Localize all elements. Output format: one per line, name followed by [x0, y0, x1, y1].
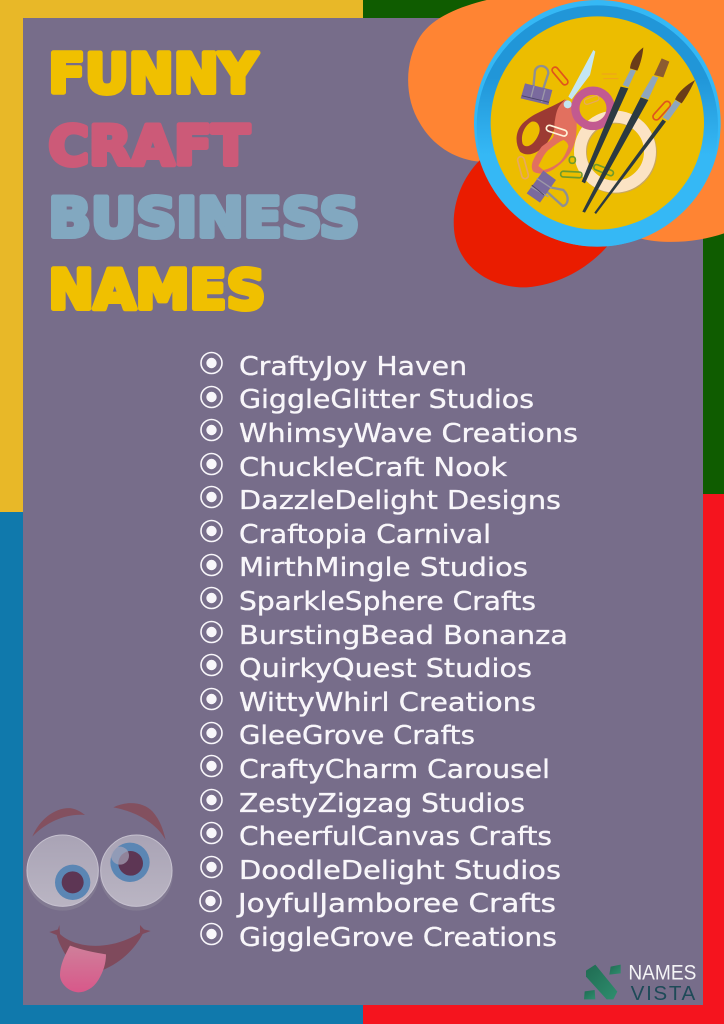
name text: WhimsyWave Creations — [239, 419, 578, 449]
iris — [110, 843, 150, 882]
name text: GiggleGrove Creations — [239, 923, 557, 953]
craft illustration — [408, 0, 724, 287]
background border: yellow — [0, 0, 363, 512]
paint brush 2 — [582, 58, 669, 213]
clip edge — [522, 96, 549, 102]
clip body — [521, 83, 552, 105]
right eye — [100, 835, 173, 911]
bristle — [654, 58, 669, 77]
names vista logo — [584, 960, 696, 1005]
list of names — [200, 352, 578, 953]
name text: BurstingBead Bonanza — [239, 621, 568, 651]
title line: Craft: CRAFT — [48, 114, 250, 178]
clip pale in ring — [584, 95, 600, 105]
ferrule — [663, 100, 681, 121]
background border: green — [363, 0, 724, 494]
tape roll — [580, 117, 651, 188]
right eyebrow — [113, 803, 166, 840]
name text: GiggleGlitter Studios — [239, 385, 534, 415]
name text: SparkleSphere Crafts — [239, 587, 536, 617]
clip pale — [517, 156, 529, 179]
eye shadow — [100, 837, 173, 911]
name text — [236, 352, 578, 953]
darker blue ring — [477, 5, 718, 247]
scissor handle light — [532, 99, 577, 173]
pink ring — [575, 91, 611, 126]
name text: MirthMingle Studios — [239, 553, 528, 583]
name text: ZestyZigzag Studios — [239, 789, 525, 819]
bristle — [630, 47, 643, 71]
logo text: names: NAMES — [628, 960, 696, 984]
title line: Names: NAMES — [48, 258, 266, 322]
clip wire front — [531, 86, 545, 102]
name text: CraftyCharm Carousel — [239, 755, 550, 785]
blue circle badge — [474, 0, 721, 247]
clip edge — [532, 185, 544, 195]
glint — [111, 847, 129, 865]
title — [48, 42, 360, 322]
pupil — [62, 871, 84, 893]
name text: JoyfulJamboree Crafts — [236, 889, 556, 919]
scissor blade — [568, 50, 595, 99]
faint pencil lines — [602, 74, 618, 79]
binder clip top — [521, 66, 552, 105]
tape shadow — [581, 118, 651, 188]
handle — [582, 97, 648, 213]
title line: Funny: FUNNY — [48, 42, 258, 106]
orange blob — [408, 0, 724, 242]
paint brush 3 — [594, 80, 695, 214]
clip green — [561, 171, 582, 178]
eye shadow — [26, 837, 99, 911]
paper clips — [517, 66, 672, 179]
name text: WittyWhirl Creations — [239, 688, 536, 718]
name text: CheerfulCanvas Crafts — [239, 822, 552, 852]
left eyebrow — [32, 808, 85, 837]
clip wire — [533, 66, 548, 97]
scissor pivot — [564, 100, 572, 108]
tongue — [60, 946, 106, 992]
name text: GleeGrove Crafts — [239, 721, 475, 751]
tape body — [580, 117, 650, 187]
clip green right — [593, 164, 614, 176]
title line: Business: BUSINESS — [48, 186, 360, 250]
ferrule — [623, 69, 636, 87]
smiling face icon — [26, 803, 173, 992]
clip wire — [545, 187, 568, 206]
background border: blue — [0, 512, 363, 1024]
clip green small — [569, 157, 575, 163]
pupil — [118, 851, 143, 876]
bristle — [675, 80, 695, 103]
mouth — [49, 925, 151, 971]
scissor handle dark — [517, 99, 565, 154]
clip body — [527, 171, 556, 203]
handle — [594, 119, 666, 214]
logo text: vista: VISTA — [631, 982, 696, 1005]
background border: red — [363, 494, 724, 1024]
logo mark — [584, 965, 621, 999]
eyeball — [27, 835, 98, 906]
name text: Craftopia Carnival — [239, 520, 491, 550]
red blob — [454, 160, 608, 287]
name text: CraftyJoy Haven — [239, 352, 467, 382]
name text: QuirkyQuest Studios — [239, 654, 532, 684]
ferrule — [641, 76, 658, 99]
clip white — [546, 125, 568, 137]
clip wire front — [531, 178, 552, 197]
handle — [582, 87, 628, 183]
bullets — [200, 352, 222, 944]
eyeball — [101, 835, 172, 906]
name text: ChuckleCraft Nook — [239, 453, 507, 483]
clip orange right — [652, 100, 672, 121]
binder clip bottom — [527, 171, 568, 206]
iris — [55, 865, 90, 900]
name text: DazzleDelight Designs — [239, 486, 561, 516]
paint brush 1 — [582, 47, 643, 183]
clip orange left — [551, 66, 569, 86]
scissors — [517, 50, 595, 173]
yellow disc — [491, 16, 704, 230]
name text: DoodleDelight Studios — [239, 856, 561, 886]
left eye — [26, 835, 99, 911]
